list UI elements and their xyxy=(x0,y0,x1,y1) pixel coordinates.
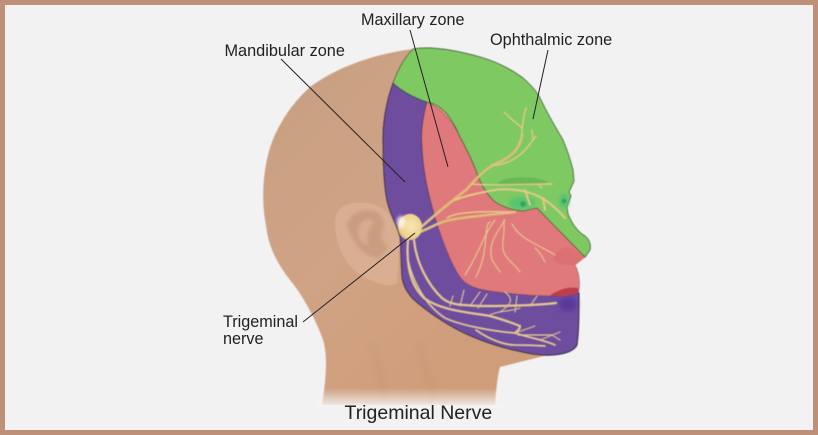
label: Trigeminal nerve: nerve xyxy=(223,330,264,348)
maxillary branches xyxy=(420,212,515,232)
lips xyxy=(550,287,579,296)
label: Ophthalmic zone: Ophthalmic zone xyxy=(490,31,612,49)
leader line: mandibular xyxy=(281,59,405,182)
leader line: ophthalmic xyxy=(533,50,548,119)
leader line: maxillary xyxy=(410,30,448,167)
ophthalmic branches xyxy=(420,135,522,228)
brow shading xyxy=(497,177,548,186)
head illustration xyxy=(263,48,590,408)
neck fold shading xyxy=(372,345,436,403)
label: Trigeminal nerve: Trigeminal xyxy=(223,313,298,331)
caption: Trigeminal Nerve: Trigeminal Nerve xyxy=(344,402,492,424)
label: Mandibular zone: Mandibular zone xyxy=(224,42,345,60)
ophthalmic zone, green xyxy=(393,48,590,257)
ear xyxy=(335,203,400,285)
nose tip xyxy=(553,248,585,265)
eye right xyxy=(559,194,569,208)
mandibular zone, purple xyxy=(383,83,579,355)
label: Mandibular zone xyxy=(224,42,405,182)
dark lip shadow xyxy=(559,297,577,311)
label: Trigeminal nerve xyxy=(223,233,415,348)
label: Maxillary zone: Maxillary zone xyxy=(361,11,464,29)
label: Ophthalmic zone xyxy=(490,31,612,119)
leader line: trigeminal nerve xyxy=(303,233,415,322)
head and neck silhouette xyxy=(263,49,577,405)
label: Maxillary zone xyxy=(361,11,464,167)
trigeminal nerve branches xyxy=(408,108,565,346)
eye left xyxy=(509,197,535,209)
mandibular branches xyxy=(414,240,556,306)
maxillary zone, red xyxy=(422,102,585,296)
neck bottom fade xyxy=(315,388,505,408)
trigeminal ganglion xyxy=(398,214,422,240)
